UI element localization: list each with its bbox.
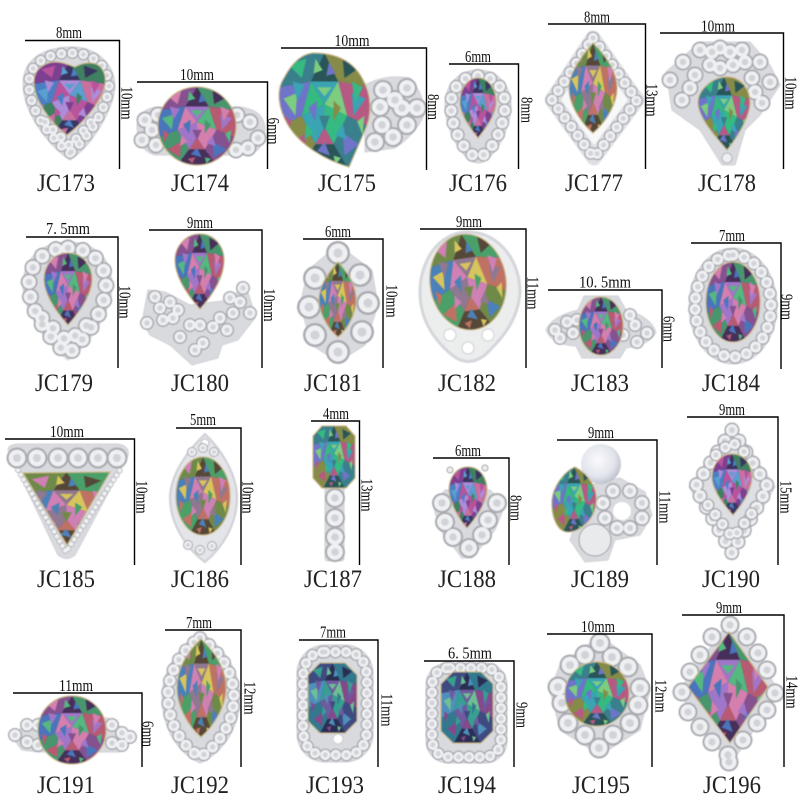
code label: JC176 [449,170,507,197]
jewel: oval halo [689,248,777,364]
width dimension [660,16,784,169]
width dimension [281,31,426,170]
code label: JC189 [571,566,629,593]
width dimension: 10mm [180,65,214,84]
product: JC189 [552,423,674,593]
jewel: kite with stone halo [678,620,780,765]
product: JC194 [424,644,532,799]
height dimension: 12mm [240,682,260,714]
jewel: teardrop double halo [23,242,112,360]
width dimension [165,613,241,767]
jewel: teardrop in rhombus [689,423,775,560]
width dimension [691,226,781,369]
width dimension: 10mm [50,422,84,441]
product: JC176 [445,47,536,197]
height dimension: 13mm [642,84,662,116]
height dimension: 11mm [656,490,674,524]
jewel: oval in pointed frame [170,434,237,562]
jewel: teardrop, pearl and ring [552,444,652,562]
width dimension: 6mm [465,47,491,66]
product: JC173 [23,23,136,197]
jewel: rectangle halo [426,663,507,763]
height dimension: 9mm [512,702,532,728]
code label: JC196 [703,772,761,799]
height dimension: 10mm [238,480,258,514]
height dimension: 9mm [778,294,796,320]
product: JC175 [279,31,443,197]
pearl [581,444,621,484]
width dimension [26,219,118,368]
width dimension [5,422,134,565]
jewel: triangle [8,444,128,558]
width dimension: 6mm [455,441,481,460]
width dimension: 7mm [719,226,745,245]
code label: JC184 [702,370,760,397]
width dimension [557,423,657,565]
product: JC181 [300,222,402,397]
width dimension: 9mm [716,598,742,617]
code label: JC180 [171,370,229,397]
code label: JC178 [698,170,756,197]
product: JC187 [304,404,376,593]
height dimension: 10mm [382,284,402,318]
code label: JC181 [304,370,362,397]
height dimension: 12mm [652,680,670,712]
jewel: oval with side clusters [546,296,656,358]
jewel: round with stone halo [550,636,650,755]
height dimension: 10mm [260,288,279,322]
width dimension [299,622,378,767]
jewel: round with side clusters [137,87,265,165]
product: JC196 [678,598,800,799]
width dimension: 6. 5mm [448,644,492,662]
product: JC192 [162,613,260,799]
jewel: marquise halo [162,632,240,763]
width dimension [449,47,518,169]
code label: JC175 [318,170,376,197]
jewel: teardrop above fan [142,234,255,365]
width dimension [424,644,514,767]
product: JC178 [660,16,800,197]
width dimension [548,8,646,169]
product: JC195 [547,617,670,799]
width dimension: 9mm [187,213,213,232]
width dimension [311,404,360,565]
height dimension: 15mm [776,480,796,514]
jewel: emerald cut on stone bar [313,426,355,561]
width dimension: 10mm [334,31,370,50]
width dimension: 9mm [719,400,745,419]
width dimension [13,676,142,767]
height dimension: 10mm [132,480,152,514]
product: JC184 [689,226,796,397]
product: JC191 [10,676,158,799]
width dimension [149,213,262,368]
code label: JC179 [35,370,93,397]
product: JC188 [433,441,526,593]
product: JC177 [548,8,662,197]
jewel: oval in filigree frame [420,229,520,362]
product: JC182 [420,212,542,397]
width dimension: 11mm [59,676,93,695]
product: JC193 [297,622,396,799]
width dimension [547,617,652,767]
width dimension: 5mm [190,410,216,429]
code label: JC182 [438,370,496,397]
height dimension: 10mm [116,286,134,318]
width dimension: 7. 5mm [46,219,90,238]
code label: JC191 [37,772,95,799]
code label: JC190 [702,566,760,593]
jewel: rectangle halo [297,645,373,762]
height dimension: 8mm [506,495,526,521]
jewel: small teardrop halo [445,70,511,163]
width dimension [433,441,509,565]
height dimension: 13mm [358,478,376,512]
width dimension: 6mm [325,222,351,241]
width dimension [420,212,526,368]
product: JC190 [687,400,796,593]
product: JC179 [23,219,134,397]
jewel: marquise in rhombus [552,38,637,158]
width dimension: 10. 5mm [579,272,631,292]
product: JC186 [170,410,258,593]
jewel: round with wings [10,696,132,764]
height dimension: 8mm [424,94,443,120]
product: JC185 [5,422,152,593]
code label: JC195 [572,772,630,799]
code label: JC183 [571,370,629,397]
code label: JC173 [37,170,95,197]
width dimension: 7mm [186,613,212,632]
height dimension: 10mm [782,76,800,110]
code label: JC187 [304,566,362,593]
jewel: teardrop with side cluster [279,53,424,167]
code label: JC174 [171,170,229,197]
height dimension: 6mm [660,316,678,342]
width dimension: 4mm [323,404,349,423]
code label: JC185 [37,566,95,593]
height dimension: 11mm [524,276,542,310]
code label: JC194 [438,772,496,799]
code label: JC186 [171,566,229,593]
width dimension [137,65,268,169]
jewel: teardrop over cluster [433,465,505,558]
code label: JC177 [565,170,623,197]
width dimension: 8mm [584,8,610,26]
width dimension: 7mm [320,622,346,642]
width dimension: 8mm [56,23,82,42]
height dimension: 11mm [378,694,396,726]
large stone [579,524,611,556]
height dimension: 6mm [264,118,283,144]
jewel: teardrop with fan cluster [666,42,780,165]
product: JC183 [546,272,678,397]
jewel: marquise with large stones [300,245,378,362]
height dimension: 8mm [518,97,536,123]
width dimension [25,23,120,169]
width dimension [682,598,784,767]
width dimension [176,410,241,565]
product: JC174 [137,65,283,197]
height dimension: 6mm [138,721,158,747]
width dimension [303,222,383,368]
width dimension: 9mm [456,212,482,231]
code label: JC192 [171,772,229,799]
width dimension: 9mm [588,423,614,442]
height dimension: 10mm [118,86,136,120]
code label: JC193 [306,772,364,799]
code label: JC188 [438,566,496,593]
width dimension [687,400,778,565]
width dimension: 10mm [701,16,735,36]
jewel: heart [23,47,115,160]
product: JC180 [142,213,279,397]
width dimension: 10mm [581,617,615,636]
